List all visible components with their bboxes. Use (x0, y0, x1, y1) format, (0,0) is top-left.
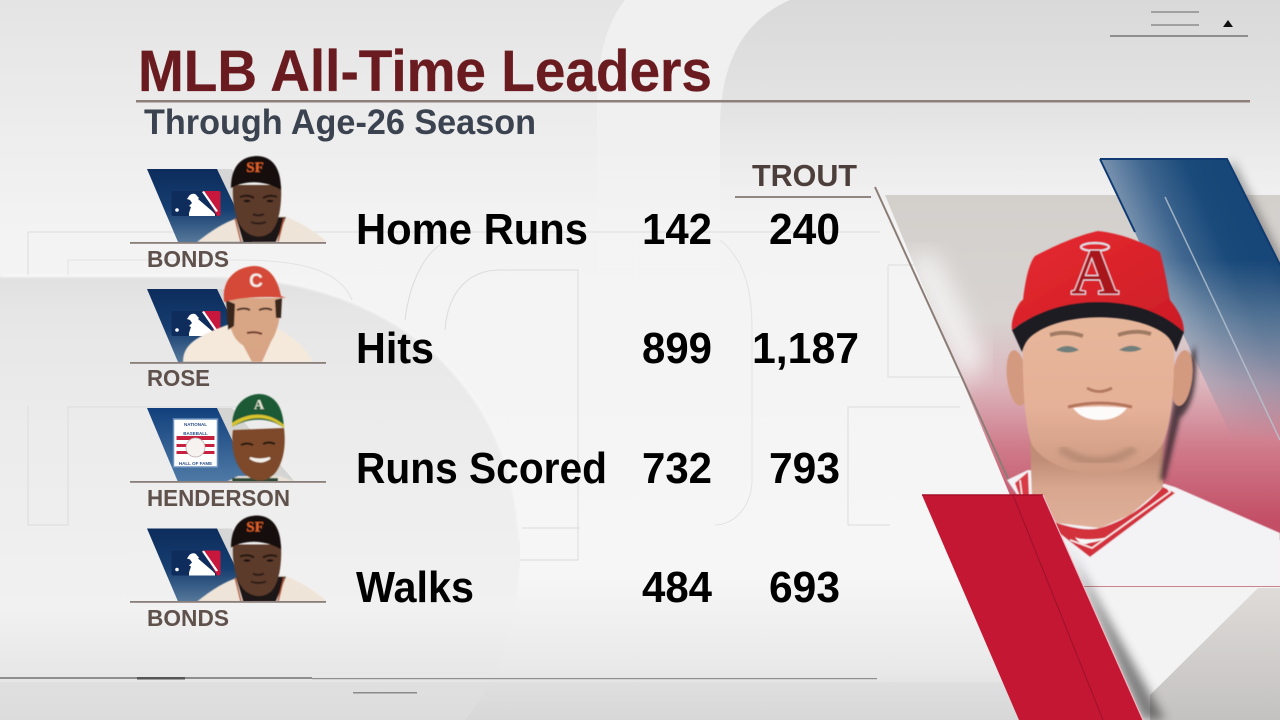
row: hits: Hits (356, 324, 434, 373)
row: walks: 484 (642, 563, 712, 612)
bottom rules (0, 677, 877, 694)
row: runs scored: 732 (642, 444, 712, 493)
slanted divider (875, 187, 1011, 485)
player: Henderson (130, 394, 326, 511)
player: Bonds: BONDS (147, 246, 229, 272)
row: runs scored: 793 (769, 444, 840, 493)
panel: Trout portrait (875, 159, 1280, 720)
row: walks: Walks (356, 563, 474, 612)
row: home runs: Home Runs (356, 205, 588, 254)
cap (1012, 231, 1184, 352)
row: hits: 899 (642, 324, 712, 373)
player: Bonds (130, 156, 327, 272)
top right indicator (1110, 11, 1248, 37)
jersey (1007, 440, 1280, 586)
player: Bonds (130, 516, 327, 631)
row: home runs: 142 (642, 205, 712, 254)
player: Henderson: HENDERSON (147, 485, 290, 511)
row: walks: 693 (769, 563, 840, 612)
title rule (136, 100, 1250, 102)
icon: Angels logo: A (1071, 236, 1119, 309)
title: MLB All-Time Leaders (138, 39, 712, 104)
player: Rose: C (249, 271, 263, 292)
icon: Hall of Fame logo: HALL OF FAME (179, 461, 212, 466)
head (1004, 305, 1196, 480)
red stripe (922, 495, 1165, 720)
lower right block (1070, 587, 1280, 720)
subtitle: Through Age-26 Season (144, 103, 536, 142)
backdrop (885, 195, 1280, 540)
row: home runs: 240 (769, 205, 840, 254)
column header: Trout: TROUT (752, 158, 857, 193)
column header: Trout (735, 158, 871, 198)
player: Rose: ROSE (147, 365, 210, 391)
player: Bonds: BONDS (147, 605, 229, 631)
row: hits (130, 266, 859, 391)
row: walks (130, 516, 840, 631)
player: Henderson: A (254, 398, 265, 413)
icon: Hall of Fame logo: NATIONAL (184, 422, 207, 427)
blue stripe (1100, 159, 1280, 450)
icon: Hall of Fame logo: BASEBALL (183, 431, 208, 436)
jersey baseline (1070, 586, 1280, 587)
row: runs scored: Runs Scored (356, 444, 607, 493)
icon: Hall of Fame logo (174, 419, 218, 467)
row: runs scored (130, 394, 840, 511)
row: home runs (130, 156, 840, 272)
row: hits: 1,187 (752, 324, 859, 373)
player: Rose (130, 266, 326, 391)
